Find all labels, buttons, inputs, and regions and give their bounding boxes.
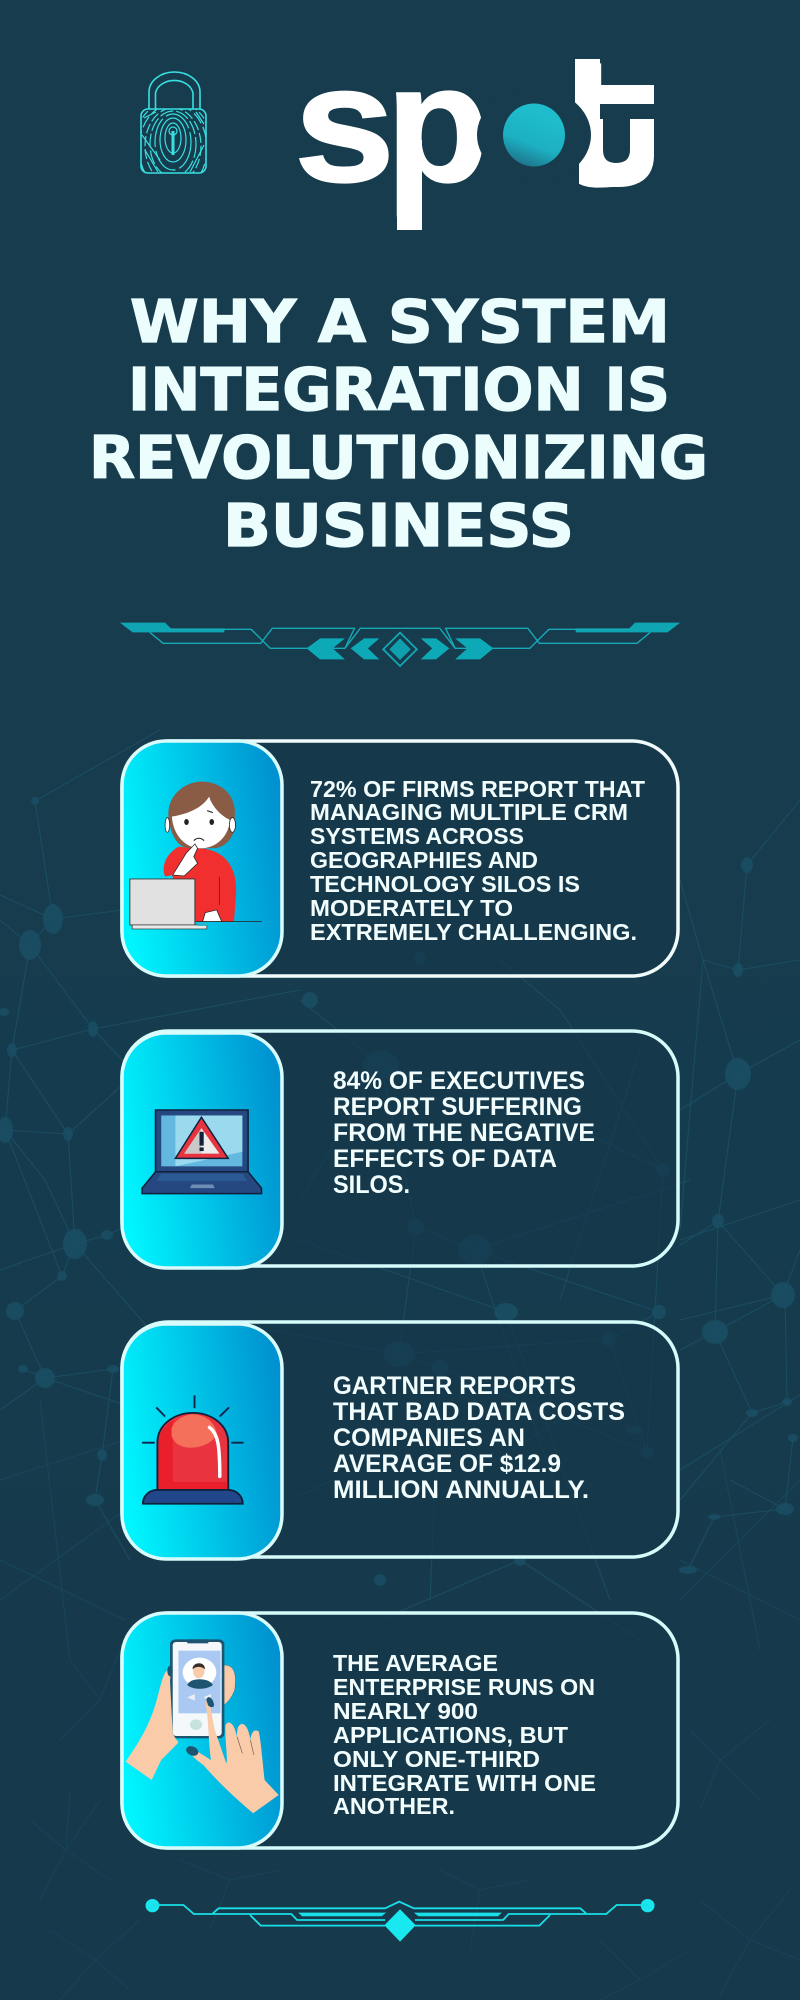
panel: card 3 bbox=[122, 1322, 678, 1559]
text: card 4: ENTERPRISE RUNS ON bbox=[333, 1674, 595, 1700]
title: REVOLUTIONIZING bbox=[89, 423, 708, 492]
text: card 1: SYSTEMS ACROSS bbox=[310, 823, 524, 849]
text: card 2: EFFECTS OF DATA bbox=[333, 1145, 557, 1173]
text: card 1: MODERATELY TO bbox=[310, 895, 513, 921]
text: card 4: THE AVERAGE bbox=[333, 1650, 498, 1676]
panel: card 2 bbox=[122, 1031, 678, 1268]
text: card 1: 72% OF FIRMS REPORT THAT bbox=[310, 776, 646, 802]
logo: spot: s bbox=[294, 32, 395, 217]
text: card 3: GARTNER REPORTS bbox=[333, 1372, 576, 1400]
text: card 1: MANAGING MULTIPLE CRM bbox=[310, 799, 628, 825]
text: card 4 bbox=[333, 1650, 596, 1819]
icon tile: hands and phone bbox=[122, 1613, 282, 1848]
background network pattern bbox=[0, 730, 800, 1660]
icon tile: laptop warning bbox=[122, 1033, 282, 1268]
logo: spot: t bbox=[547, 16, 631, 226]
icon tile: worried woman at laptop bbox=[122, 741, 282, 976]
text: card 1: TECHNOLOGY SILOS IS bbox=[310, 871, 580, 897]
text: card 2: REPORT SUFFERING bbox=[333, 1093, 582, 1121]
text: card 3: MILLION ANNUALLY. bbox=[333, 1476, 589, 1504]
title: BUSINESS bbox=[223, 491, 574, 560]
title bbox=[89, 287, 708, 560]
bottom divider bbox=[146, 1899, 655, 1942]
title: INTEGRATION IS bbox=[128, 355, 670, 424]
logo: spot: p bbox=[386, 32, 489, 217]
text: card 1: EXTREMELY CHALLENGING. bbox=[310, 919, 637, 945]
text: card 4: APPLICATIONS, BUT bbox=[333, 1722, 569, 1748]
icon: fingerprint padlock bbox=[140, 71, 207, 174]
text: card 2: 84% OF EXECUTIVES bbox=[333, 1067, 585, 1095]
text: card 2 bbox=[333, 1067, 595, 1199]
panel: card 4 bbox=[122, 1613, 678, 1848]
top divider bbox=[120, 623, 680, 666]
text: card 3: THAT BAD DATA COSTS bbox=[333, 1398, 625, 1426]
text: card 4: NEARLY 900 bbox=[333, 1698, 478, 1724]
text: card 1 bbox=[310, 776, 646, 945]
panel: card 1 bbox=[122, 741, 678, 976]
text: card 1: GEOGRAPHIES AND bbox=[310, 847, 538, 873]
text: card 3: COMPANIES AN bbox=[333, 1424, 525, 1452]
text: card 3: AVERAGE OF $12.9 bbox=[333, 1450, 561, 1478]
background network nodes bbox=[0, 797, 798, 1586]
text: card 4: ONLY ONE-THIRD bbox=[333, 1746, 540, 1772]
text: card 3 bbox=[333, 1372, 625, 1504]
text: card 2: FROM THE NEGATIVE bbox=[333, 1119, 595, 1147]
logo: spot bbox=[294, 16, 654, 230]
background faint star bursts bbox=[30, 1650, 800, 2000]
text: card 2: SILOS. bbox=[333, 1171, 410, 1199]
text: card 4: ANOTHER. bbox=[333, 1793, 455, 1819]
title: WHY A SYSTEM bbox=[130, 287, 670, 356]
icon tile: red alarm bbox=[122, 1324, 282, 1559]
text: card 4: INTEGRATE WITH ONE bbox=[333, 1770, 596, 1796]
